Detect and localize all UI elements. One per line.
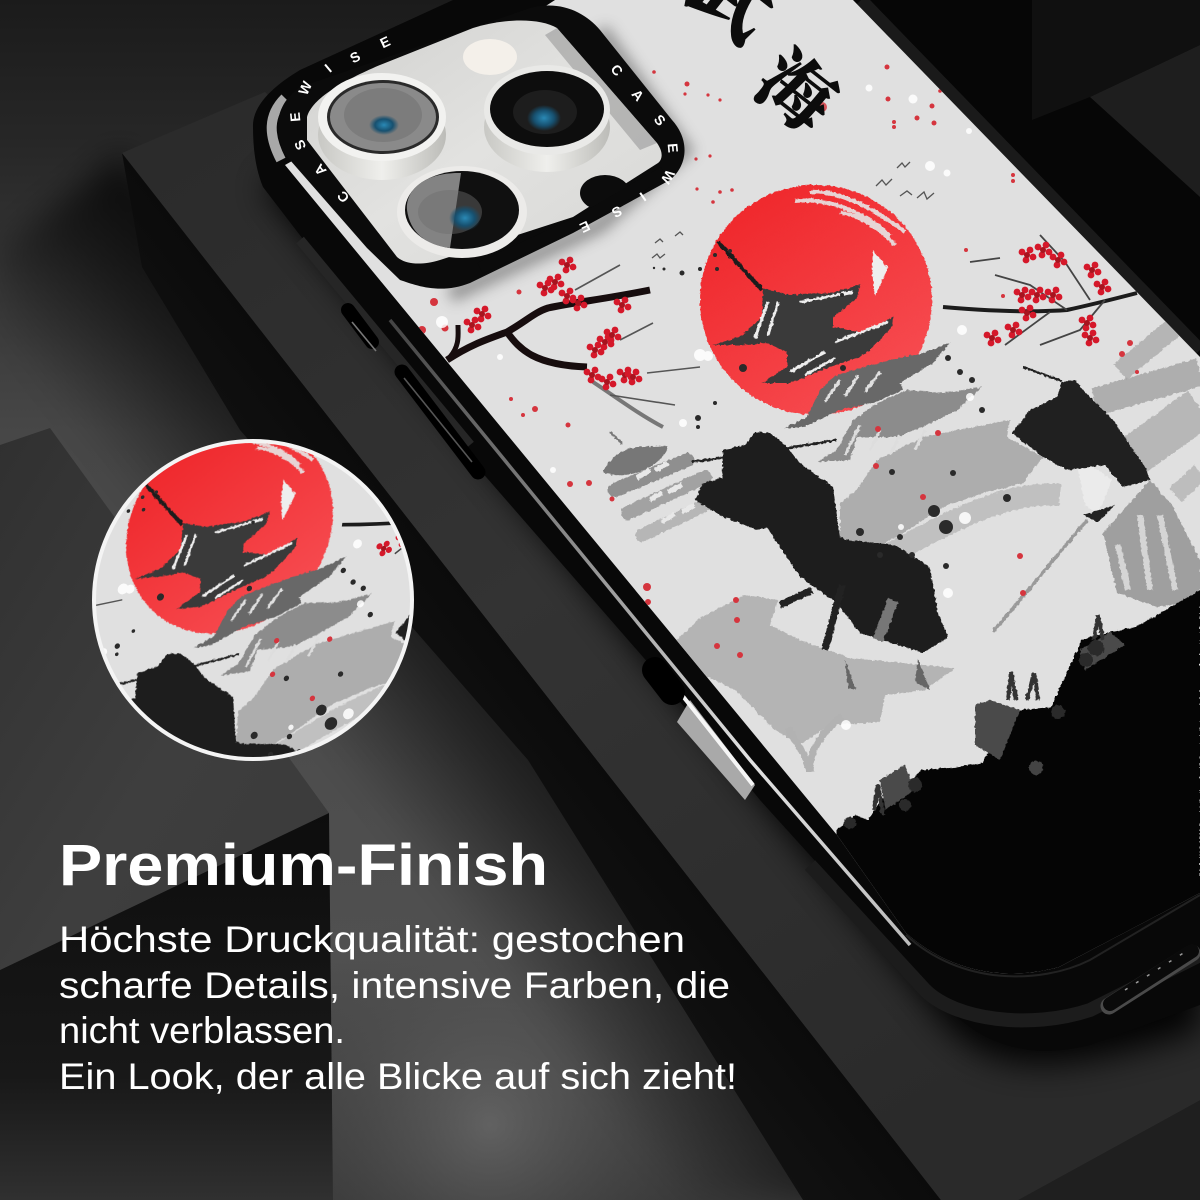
inset magnifier circle [92,439,414,761]
glossy rim highlight [390,320,910,945]
CASEWISE lettering: S [609,203,625,221]
CASEWISE lettering: E [287,112,303,122]
CASEWISE lettering: W [657,167,678,187]
CASEWISE lettering: E [377,33,393,51]
CASEWISE lettering: C [608,61,626,79]
right rim [861,0,1200,350]
camera window [307,20,662,264]
CASEWISE lettering: E [665,143,681,153]
bezel lower band over sensor [480,172,664,268]
scene: sun, pagodas, samurai, blossoms, calligraphy [418,0,1200,794]
CASEWISE lettering: A [311,161,329,179]
lens bottom [397,166,527,258]
CASEWISE lettering: W [295,78,315,97]
CASEWISE lettering: C [334,188,352,206]
camera bezel [272,5,685,289]
phone shadow [263,100,1200,1064]
CASEWISE lettering: E [577,218,593,236]
CASEWISE lettering: S [347,48,363,66]
body copy [59,919,737,1097]
CASEWISE lettering: S [291,137,309,153]
body copy: Ein Look, der alle Blicke auf sich zieht! [59,1056,737,1097]
black ink mass [830,590,1200,980]
paper [285,0,1200,980]
CASEWISE lettering [287,33,681,236]
body copy: Höchste Druckqualität: gestochen [59,919,685,960]
CASEWISE lettering: S [651,111,669,129]
side button small [348,310,376,351]
body copy: scharfe Details, intensive Farben, die [59,965,730,1006]
heading: Premium-Finish [59,833,548,898]
rim lower curve [906,895,1200,976]
body copy: nicht verblassen. [59,1010,345,1051]
CASEWISE lettering: I [637,189,649,205]
phone case [253,0,1200,1051]
lens top right [484,65,610,172]
speaker slot [1109,951,1192,1006]
CASEWISE lettering: A [629,86,647,104]
bezel corner print strip [272,98,285,160]
left foreground block [0,428,333,1200]
silver side button [655,670,755,800]
side button long [402,372,478,472]
CASEWISE lettering: I [321,61,335,75]
case lower rim sheen [810,865,1200,1020]
lens top left [318,73,446,180]
print artwork [285,0,1200,980]
lidar sensor [580,175,630,211]
flash [463,39,517,75]
